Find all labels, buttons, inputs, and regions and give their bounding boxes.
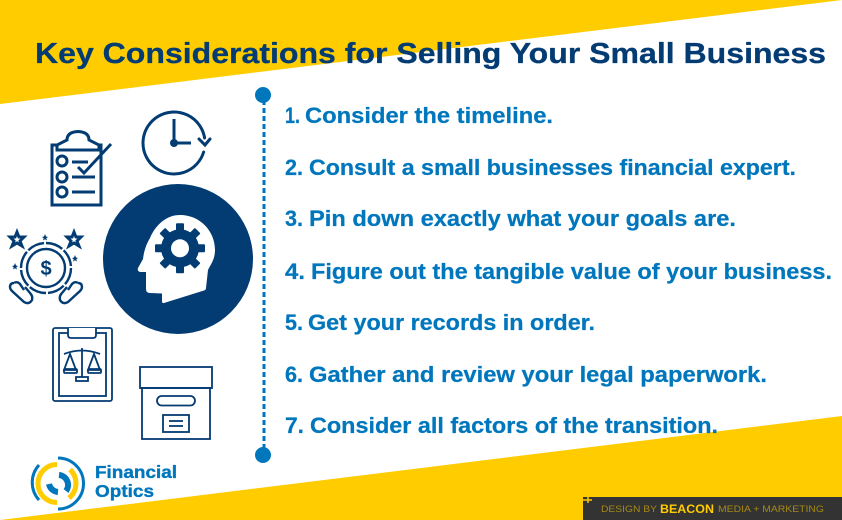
item 3: 3. — [285, 206, 303, 231]
item 3: Pin down exactly what your goals are. — [309, 206, 736, 231]
item 1: 1. — [285, 103, 300, 128]
icon: legal clipboard with scales — [53, 328, 112, 401]
item 5: 5. — [285, 310, 303, 335]
item 2: Consult a small businesses financial expert. — [309, 155, 796, 180]
icon: coin with stars and hands: $ — [40, 258, 52, 280]
designer credit bar — [583, 497, 842, 520]
item 4: 4. — [285, 259, 305, 284]
icon: coin with stars and hands — [10, 232, 82, 303]
logo mark — [32, 458, 84, 509]
logo: Financial Optics — [32, 458, 177, 509]
designer credit bar: BEACON — [660, 502, 714, 516]
item 1: Consider the timeline. — [305, 103, 553, 128]
icon: clock — [143, 112, 210, 174]
designer credit bar: MEDIA + MARKETING — [718, 504, 824, 515]
timeline connector — [255, 87, 271, 463]
item 6: Gather and review your legal paperwork. — [309, 362, 767, 387]
item 7: 7. — [285, 413, 304, 438]
item 4: Figure out the tangible value of your business. — [311, 259, 832, 284]
logo: Financial Optics: Optics — [95, 481, 154, 501]
logo wordmark: Financial — [95, 462, 177, 482]
title: Key Considerations for Selling Your Small Business — [35, 38, 826, 70]
designer credit bar: DESIGN BY — [601, 504, 658, 515]
list of considerations — [285, 103, 832, 438]
icon: archive box — [140, 367, 212, 439]
item 5: Get your records in order. — [308, 310, 595, 335]
bottom yellow banner — [0, 416, 842, 520]
item 7: Consider all factors of the transition. — [310, 413, 718, 438]
icon: checklist clipboard — [52, 132, 111, 205]
icon: head with gear — [103, 184, 253, 334]
item 6: 6. — [285, 362, 303, 387]
top yellow banner — [0, 0, 842, 104]
item 2: 2. — [285, 155, 303, 180]
